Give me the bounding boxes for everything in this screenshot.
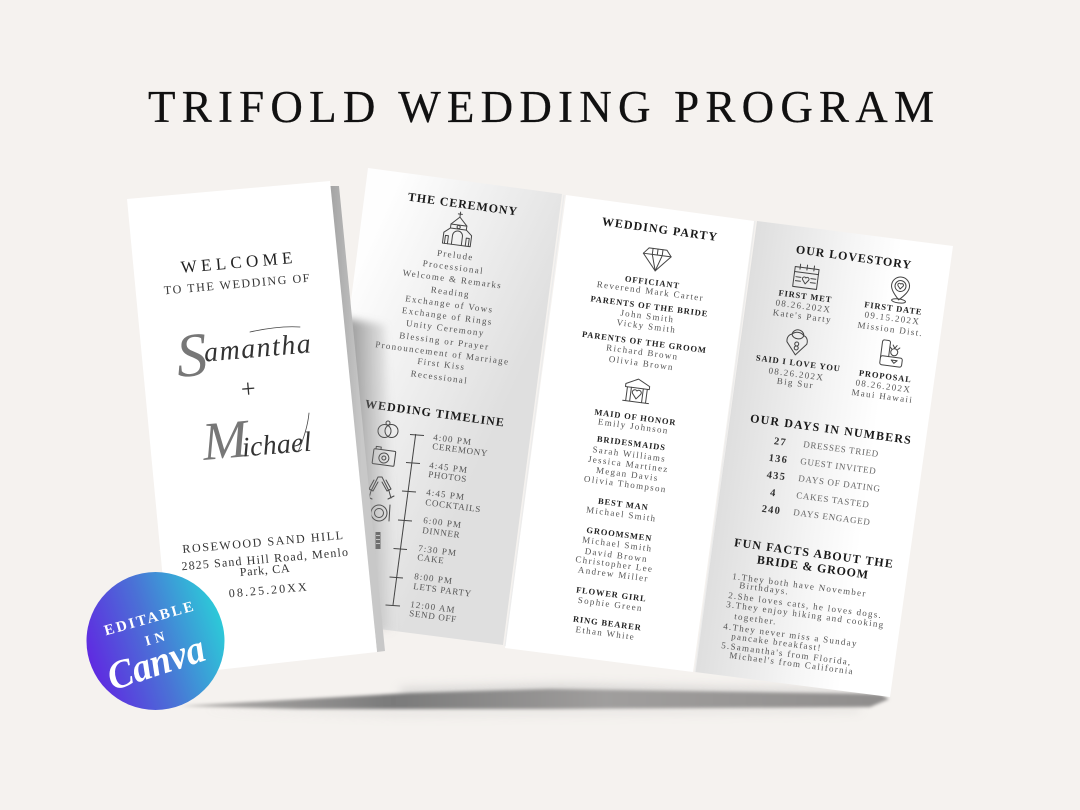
icon: champagne glasses [366, 477, 394, 499]
heading: fun facts: FUN FACTS ABOUT THE [733, 535, 894, 571]
badge: editable in canva [86, 572, 224, 710]
party: flower girl [576, 584, 647, 613]
days in numbers: 136 [768, 453, 789, 466]
subtitle: TO THE WEDDING OF [163, 271, 310, 297]
timeline entries: SEND OFF [409, 608, 458, 624]
love story: said i love you: Big Sur [776, 376, 814, 390]
love story: first met: 08.26.202X [775, 297, 832, 315]
party: bridesmaids: Megan Davis [595, 465, 659, 483]
party: flower girl: Sophie Green [577, 595, 643, 613]
ceremony list: Unity Ceremony [406, 318, 485, 338]
party: groomsmen: GROOMSMEN [586, 525, 653, 543]
days in numbers: DAYS ENGAGED [793, 507, 871, 527]
icon: diamond [641, 247, 672, 273]
party: best man: Michael Smith [586, 504, 657, 524]
timeline entries: CEREMONY [432, 441, 489, 458]
party: best man: BEST MAN [598, 496, 649, 512]
heading: wedding party: WEDDING PARTY [601, 214, 718, 244]
love story: proposal [851, 368, 914, 405]
venue details: 2825 Sand Hill Road, Menlo [181, 545, 348, 573]
love story: first met: FIRST MET [778, 288, 833, 305]
love story: proposal: Maui Hawaii [851, 387, 914, 405]
welcome heading: WELCOME [180, 248, 293, 277]
fun facts list: Birthdays. [739, 580, 790, 597]
love story: first date: FIRST DATE [864, 299, 923, 317]
party: ring bearer: Ethan White [575, 624, 636, 642]
love story: proposal: 08.26.202X [855, 377, 912, 395]
love story: said i love you: 08.26.202X [768, 365, 825, 383]
badge: editable in canva: Canva [101, 625, 210, 699]
fun facts list: pancake breakfast! [731, 631, 822, 653]
ceremony list: Prelude [436, 248, 474, 262]
script names: S [173, 321, 210, 391]
icon: gazebo [623, 377, 651, 404]
icon: plate [371, 505, 390, 521]
fun facts list: together. [734, 611, 778, 627]
script names [173, 311, 315, 472]
timeline entries: 12:00 AM [410, 599, 456, 615]
ceremony list: Blessing or Prayer [399, 330, 490, 352]
heading: fun facts: BRIDE & GROOM [756, 553, 869, 582]
party: officiant: OFFICIANT [624, 273, 680, 291]
party: parents of the groom: PARENTS OF THE GROOM [581, 329, 707, 355]
venue details: Park, CA [239, 561, 290, 579]
timeline entries: 8:00 PM [414, 571, 454, 586]
party: parents of the bride: Vicky Smith [616, 317, 677, 335]
timeline entries: 6:00 PM [423, 515, 463, 530]
party: officiant: Reverend Mark Carter [596, 279, 705, 303]
panel: the ceremony and timeline [310, 168, 562, 645]
script names: + [238, 374, 258, 404]
days in numbers: DAYS OF DATING [798, 473, 881, 494]
title: TRIFOLD WEDDING PROGRAM [148, 82, 934, 132]
icon: heart lock [785, 329, 809, 356]
fun facts list: 1.They both have November [732, 571, 867, 599]
timeline entries: LETS PARTY [413, 581, 472, 599]
party: parents of the groom [581, 329, 707, 372]
badge: editable in canva: IN [143, 630, 167, 650]
icon: map pin [889, 276, 911, 304]
timeline entries: 4:45 PM [426, 487, 466, 502]
icon: ring box [880, 340, 905, 367]
party: parents of the bride [590, 293, 709, 335]
party: groomsmen: David Brown [584, 546, 649, 564]
ceremony list: Exchange of Vows [405, 293, 494, 315]
icon: calendar [793, 264, 819, 289]
love story: first date [857, 299, 924, 338]
timeline entries [409, 432, 489, 624]
ceremony list: Exchange of Rings [401, 305, 493, 327]
love story: proposal: PROPOSAL [858, 368, 912, 384]
timeline entries: DINNER [422, 525, 461, 540]
fun facts list: 2.She loves cats, he loves dogs. [728, 590, 883, 620]
party: parents of the bride: PARENTS OF THE BRIDE [590, 293, 709, 319]
party: bridesmaids: Sarah Williams [592, 444, 667, 464]
party: groomsmen: Michael Smith [582, 534, 653, 554]
script names: amantha [203, 328, 313, 369]
heading: our days in numbers: OUR DAYS IN NUMBERS [749, 411, 912, 447]
days in numbers: 435 [766, 470, 787, 483]
love story: first date: Mission Dist. [857, 320, 924, 338]
love story: first date: 09.15.202X [864, 309, 921, 327]
icon: church [442, 210, 474, 247]
fun facts list: 3.They enjoy hiking and cooking [726, 599, 885, 630]
days in numbers: 240 [761, 504, 782, 517]
love story: first met [772, 288, 833, 325]
venue details [181, 528, 348, 600]
heading: the ceremony: THE CEREMONY [407, 190, 518, 218]
party: groomsmen: Andrew Miller [577, 564, 649, 584]
party: parents of the groom: Richard Brown [606, 342, 679, 362]
ceremony list: Pronouncement of Marriage [375, 339, 510, 367]
panel: wedding party [505, 195, 754, 672]
party: groomsmen: Christopher Lee [575, 554, 654, 574]
badge: editable in canva: EDITABLE [102, 599, 195, 639]
venue details: 08.25.20XX [228, 580, 307, 600]
party: maid of honor: MAID OF HONOR [594, 407, 677, 427]
days in numbers: 27 [773, 436, 787, 449]
love story: said i love you [755, 352, 841, 390]
front panel side strip [330, 186, 385, 652]
timeline entries: 7:30 PM [418, 543, 458, 558]
panel: our lovestory [695, 221, 953, 697]
timeline entries: 4:45 PM [429, 460, 469, 475]
days in numbers: 4 [769, 488, 777, 499]
ceremony list: First Kiss [417, 356, 466, 372]
days in numbers: DRESSES TRIED [803, 439, 880, 459]
timeline line and ticks [386, 434, 424, 606]
fun facts list: 4.They never miss a Sunday [723, 621, 858, 649]
love story: first met: Kate's Party [772, 307, 833, 325]
ceremony list: Processional [422, 258, 485, 276]
ceremony list: Recessional [410, 368, 469, 386]
fun facts list [721, 571, 885, 676]
party: parents of the bride: John Smith [620, 308, 675, 325]
party: bridesmaids: BRIDESMAIDS [596, 434, 666, 453]
party: best man [586, 496, 657, 524]
party: bridesmaids [583, 434, 669, 494]
icon: rings [378, 421, 398, 438]
party: flower girl: FLOWER GIRL [576, 584, 647, 604]
party: maid of honor: Emily Johnson [597, 416, 669, 436]
heading: our lovestory: OUR LOVESTORY [795, 242, 912, 272]
timeline entries: CAKE [417, 552, 445, 566]
ceremony list: Reading [430, 284, 471, 300]
ceremony list [375, 248, 510, 386]
timeline entries: PHOTOS [428, 469, 468, 484]
panel fold edges [505, 195, 755, 672]
party: ring bearer: RING BEARER [572, 614, 642, 632]
script names: Michael [199, 403, 313, 472]
ceremony list: Welcome & Remarks [402, 268, 503, 291]
timeline entries: 4:00 PM [433, 432, 473, 447]
days in numbers: GUEST INVITED [800, 456, 877, 476]
ground shadow [180, 684, 889, 716]
timeline entries: COCKTAILS [425, 497, 482, 514]
icon: camera [372, 446, 396, 466]
party: ring bearer [572, 614, 642, 642]
days in numbers: CAKES TASTED [796, 490, 870, 510]
love story: said i love you: SAID I LOVE YOU [755, 352, 841, 374]
party: bridesmaids: Olivia Thompson [583, 474, 667, 494]
heading: wedding timeline: WEDDING TIMELINE [364, 397, 505, 429]
party: bridesmaids: Jessica Martinez [587, 454, 669, 474]
icon: cake [376, 532, 380, 549]
fun facts list: 5.Samantha's from Florida, [721, 640, 852, 667]
fun facts list: Michael's from California [729, 650, 855, 676]
party: parents of the groom: Olivia Brown [608, 354, 674, 372]
party: groomsmen [575, 525, 654, 584]
panel: front cover [127, 181, 377, 675]
shadow of front panel on inside [345, 318, 396, 632]
days in numbers [761, 436, 881, 527]
venue details: ROSEWOOD SAND HILL [182, 528, 343, 556]
